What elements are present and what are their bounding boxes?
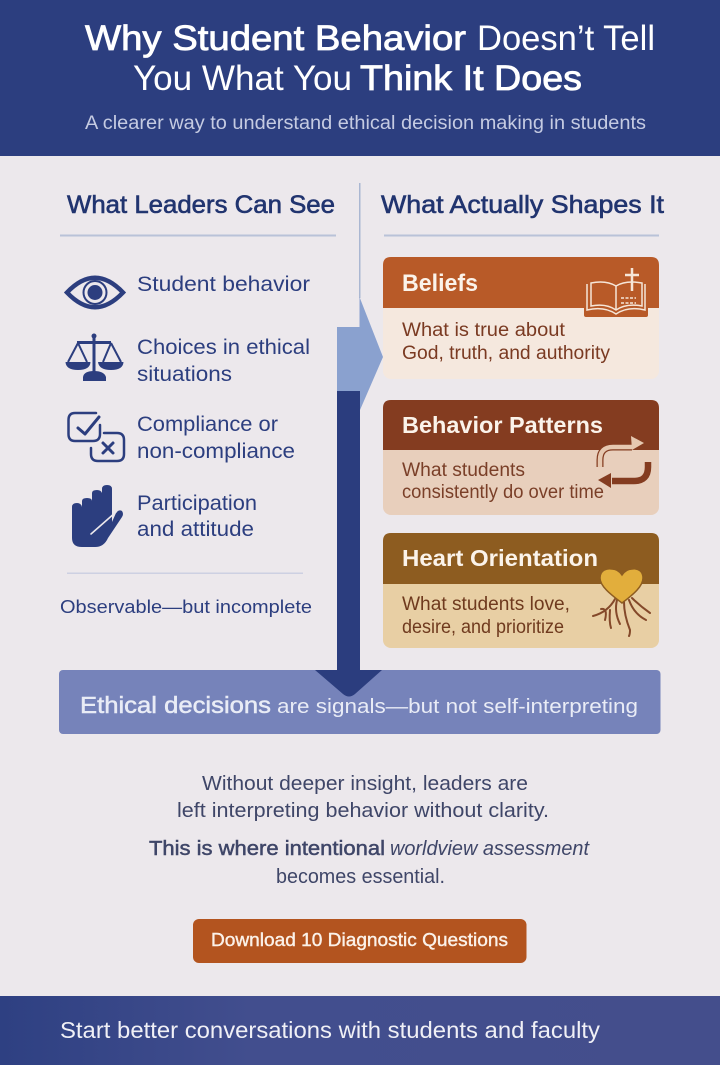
icon: raised hand: [72, 485, 123, 547]
card: behavior patterns: Behavior Patterns: [402, 412, 603, 438]
button: download: [193, 919, 526, 963]
band: ethical decisions: are signals—but not self-interpreting: [277, 696, 638, 718]
header banner: [0, 0, 720, 156]
card: behavior patterns: What students: [402, 460, 525, 481]
card: behavior patterns: consistently do over time: [402, 482, 604, 503]
title: Why Student Behavior: [85, 19, 466, 58]
footer banner: Start better conversations with students and faculty: [60, 1017, 601, 1043]
arrow: light branch to beliefs: [337, 297, 383, 410]
text block: without deeper insight: left interpreting behavior without clarity.: [177, 800, 549, 822]
icon: heart with roots: [593, 569, 650, 636]
item: student behavior: [67, 273, 310, 307]
heading: what leaders can see: What Leaders Can See: [67, 191, 335, 219]
item: participation: Participation: [137, 492, 257, 515]
text block: worldview assessment: worldview assessment: [390, 838, 590, 860]
icon: open book with cross: [584, 268, 648, 317]
text block: worldview assessment: [149, 838, 590, 888]
card: heart orientation: desire, and prioritize: [402, 617, 564, 638]
title: You What You: [133, 59, 352, 98]
card: behavior patterns: [383, 400, 659, 515]
item: choices in ethical situations: [66, 334, 310, 386]
text block: without deeper insight: [177, 773, 549, 822]
heading: what actually shapes it: What Actually Shapes It: [381, 191, 664, 219]
subtitle: A clearer way to understand ethical decision making in students: [85, 113, 646, 134]
text block: worldview assessment: This is where intentional: [149, 838, 385, 860]
item: choices in ethical situations: Choices in ethical: [137, 336, 310, 359]
card: beliefs: What is true about: [402, 320, 566, 341]
arrow: dark down arrow: [315, 391, 382, 696]
item: participation: and attitude: [137, 518, 254, 541]
footer banner: [0, 996, 720, 1065]
icon: scales: [66, 334, 124, 381]
item: choices in ethical situations: situations: [137, 363, 232, 386]
item: compliance: Compliance or: [137, 413, 278, 436]
title: Think It Does: [360, 59, 582, 98]
card: heart orientation: What students love,: [402, 594, 570, 615]
card: beliefs: God, truth, and authority: [402, 343, 611, 364]
text block: worldview assessment: becomes essential.: [276, 866, 445, 888]
icon: cycle arrows: [598, 436, 648, 488]
text block: without deeper insight: Without deeper insight, leaders are: [202, 773, 528, 795]
item: compliance: [68, 413, 295, 463]
icon: check and cross boxes: [68, 413, 124, 461]
icon: eye: [67, 278, 123, 307]
card: beliefs: [383, 257, 659, 379]
band: ethical decisions: [59, 670, 660, 734]
button: download: Download 10 Diagnostic Questions: [211, 930, 508, 950]
title: Doesn’t Tell: [477, 19, 655, 58]
card: heart orientation: [383, 533, 659, 648]
item: participation: [72, 485, 257, 547]
title: [85, 19, 655, 98]
band: ethical decisions: Ethical decisions: [80, 692, 271, 718]
item: compliance: non-compliance: [137, 440, 295, 463]
card: heart orientation: Heart Orientation: [402, 545, 598, 571]
item: student behavior: Student behavior: [137, 273, 310, 296]
caption: observable but incomplete: Observable—but incomplete: [60, 597, 312, 617]
card: beliefs: Beliefs: [402, 270, 478, 297]
